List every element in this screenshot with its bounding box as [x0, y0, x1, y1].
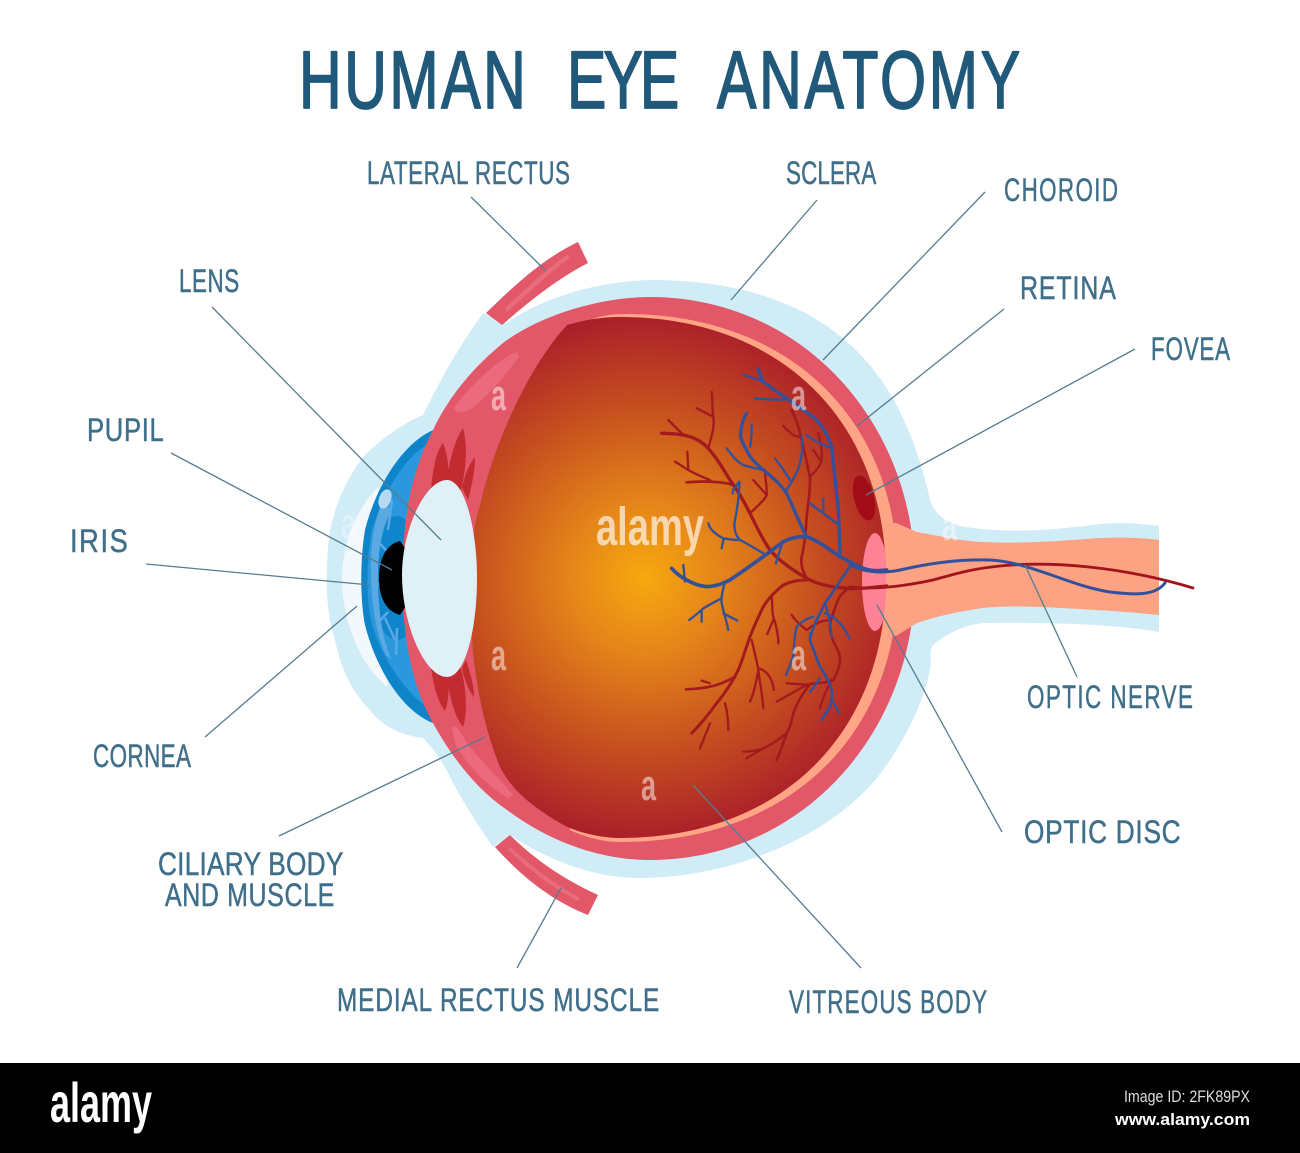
- image watermark: a: [791, 631, 806, 680]
- label: sclera: SCLERA: [786, 155, 877, 191]
- cornea: [342, 487, 400, 687]
- retina band: [570, 314, 898, 842]
- label: cornea: [93, 606, 357, 774]
- label: vitreous body: VITREOUS BODY: [789, 984, 987, 1020]
- pupil: [379, 541, 410, 615]
- label: choroid: CHOROID: [1004, 172, 1118, 208]
- optic nerve: [888, 523, 1159, 636]
- ciliary muscle fibres: [431, 428, 475, 727]
- retinal blood vessels: [662, 368, 887, 760]
- ciliary highlights: [452, 352, 519, 798]
- label: ciliary body and muscle: AND MUSCLE: [165, 878, 334, 914]
- label: lens: [179, 263, 441, 540]
- vitreous body: [470, 317, 886, 838]
- lateral rectus muscle: [486, 242, 588, 325]
- lens: [402, 480, 477, 677]
- image watermark: a: [641, 761, 656, 810]
- label: lateral rectus: LATERAL RECTUS: [367, 155, 570, 191]
- image watermark: a: [341, 499, 356, 548]
- image watermark: a: [491, 371, 506, 420]
- arteries: [662, 392, 887, 760]
- title: ANATOMY: [717, 35, 1020, 126]
- eyeball diagram: [327, 242, 1193, 915]
- label: ciliary body and muscle: [158, 737, 485, 914]
- label: iris: [70, 524, 370, 585]
- label: optic disc: OPTIC DISC: [1024, 816, 1181, 851]
- label: optic nerve: OPTIC NERVE: [1027, 679, 1193, 715]
- image watermark: a: [491, 631, 506, 680]
- image watermark: a: [791, 371, 806, 420]
- footer image id: Image ID: 2FK89PX: [1124, 1087, 1250, 1106]
- label: sclera: [731, 155, 877, 300]
- optic nerve blood vessels: [850, 560, 1193, 594]
- title: HUMAN: [299, 35, 526, 126]
- medial rectus muscle: [495, 835, 598, 915]
- label: iris: IRIS: [70, 524, 128, 560]
- footer bar: [0, 1063, 1300, 1153]
- fovea: [849, 473, 879, 523]
- title: [299, 35, 1020, 126]
- label: retina: [857, 271, 1117, 426]
- label: pupil: PUPIL: [87, 413, 164, 449]
- sclera ring: [402, 297, 915, 860]
- label: optic disc: [877, 605, 1181, 851]
- label: retina: RETINA: [1020, 271, 1117, 307]
- label: lens: LENS: [179, 263, 239, 299]
- footer logo: alamy: [50, 1071, 152, 1134]
- label: ciliary body and muscle: CILIARY BODY: [158, 848, 343, 883]
- label: pupil: [87, 413, 392, 570]
- label: medial rectus muscle: MEDIAL RECTUS MUSCLE: [337, 983, 659, 1019]
- image watermark: [341, 371, 957, 810]
- image watermark: a: [942, 501, 957, 550]
- label: lateral rectus: [367, 155, 570, 271]
- footer url: www.alamy.com: [1114, 1110, 1250, 1129]
- veins: [672, 368, 887, 720]
- label: optic nerve: [1025, 565, 1193, 715]
- outer conjunctiva layer: [327, 280, 1159, 878]
- optic disc: [862, 533, 888, 631]
- label: vitreous body: [693, 785, 987, 1020]
- title: EYE: [567, 35, 679, 126]
- label: fovea: [866, 331, 1231, 495]
- label: cornea: CORNEA: [93, 738, 191, 774]
- iris: [361, 430, 433, 723]
- label: fovea: FOVEA: [1151, 331, 1231, 367]
- image watermark: alamy: [596, 497, 704, 557]
- label: medial rectus muscle: [337, 888, 659, 1019]
- label: choroid: [823, 172, 1118, 360]
